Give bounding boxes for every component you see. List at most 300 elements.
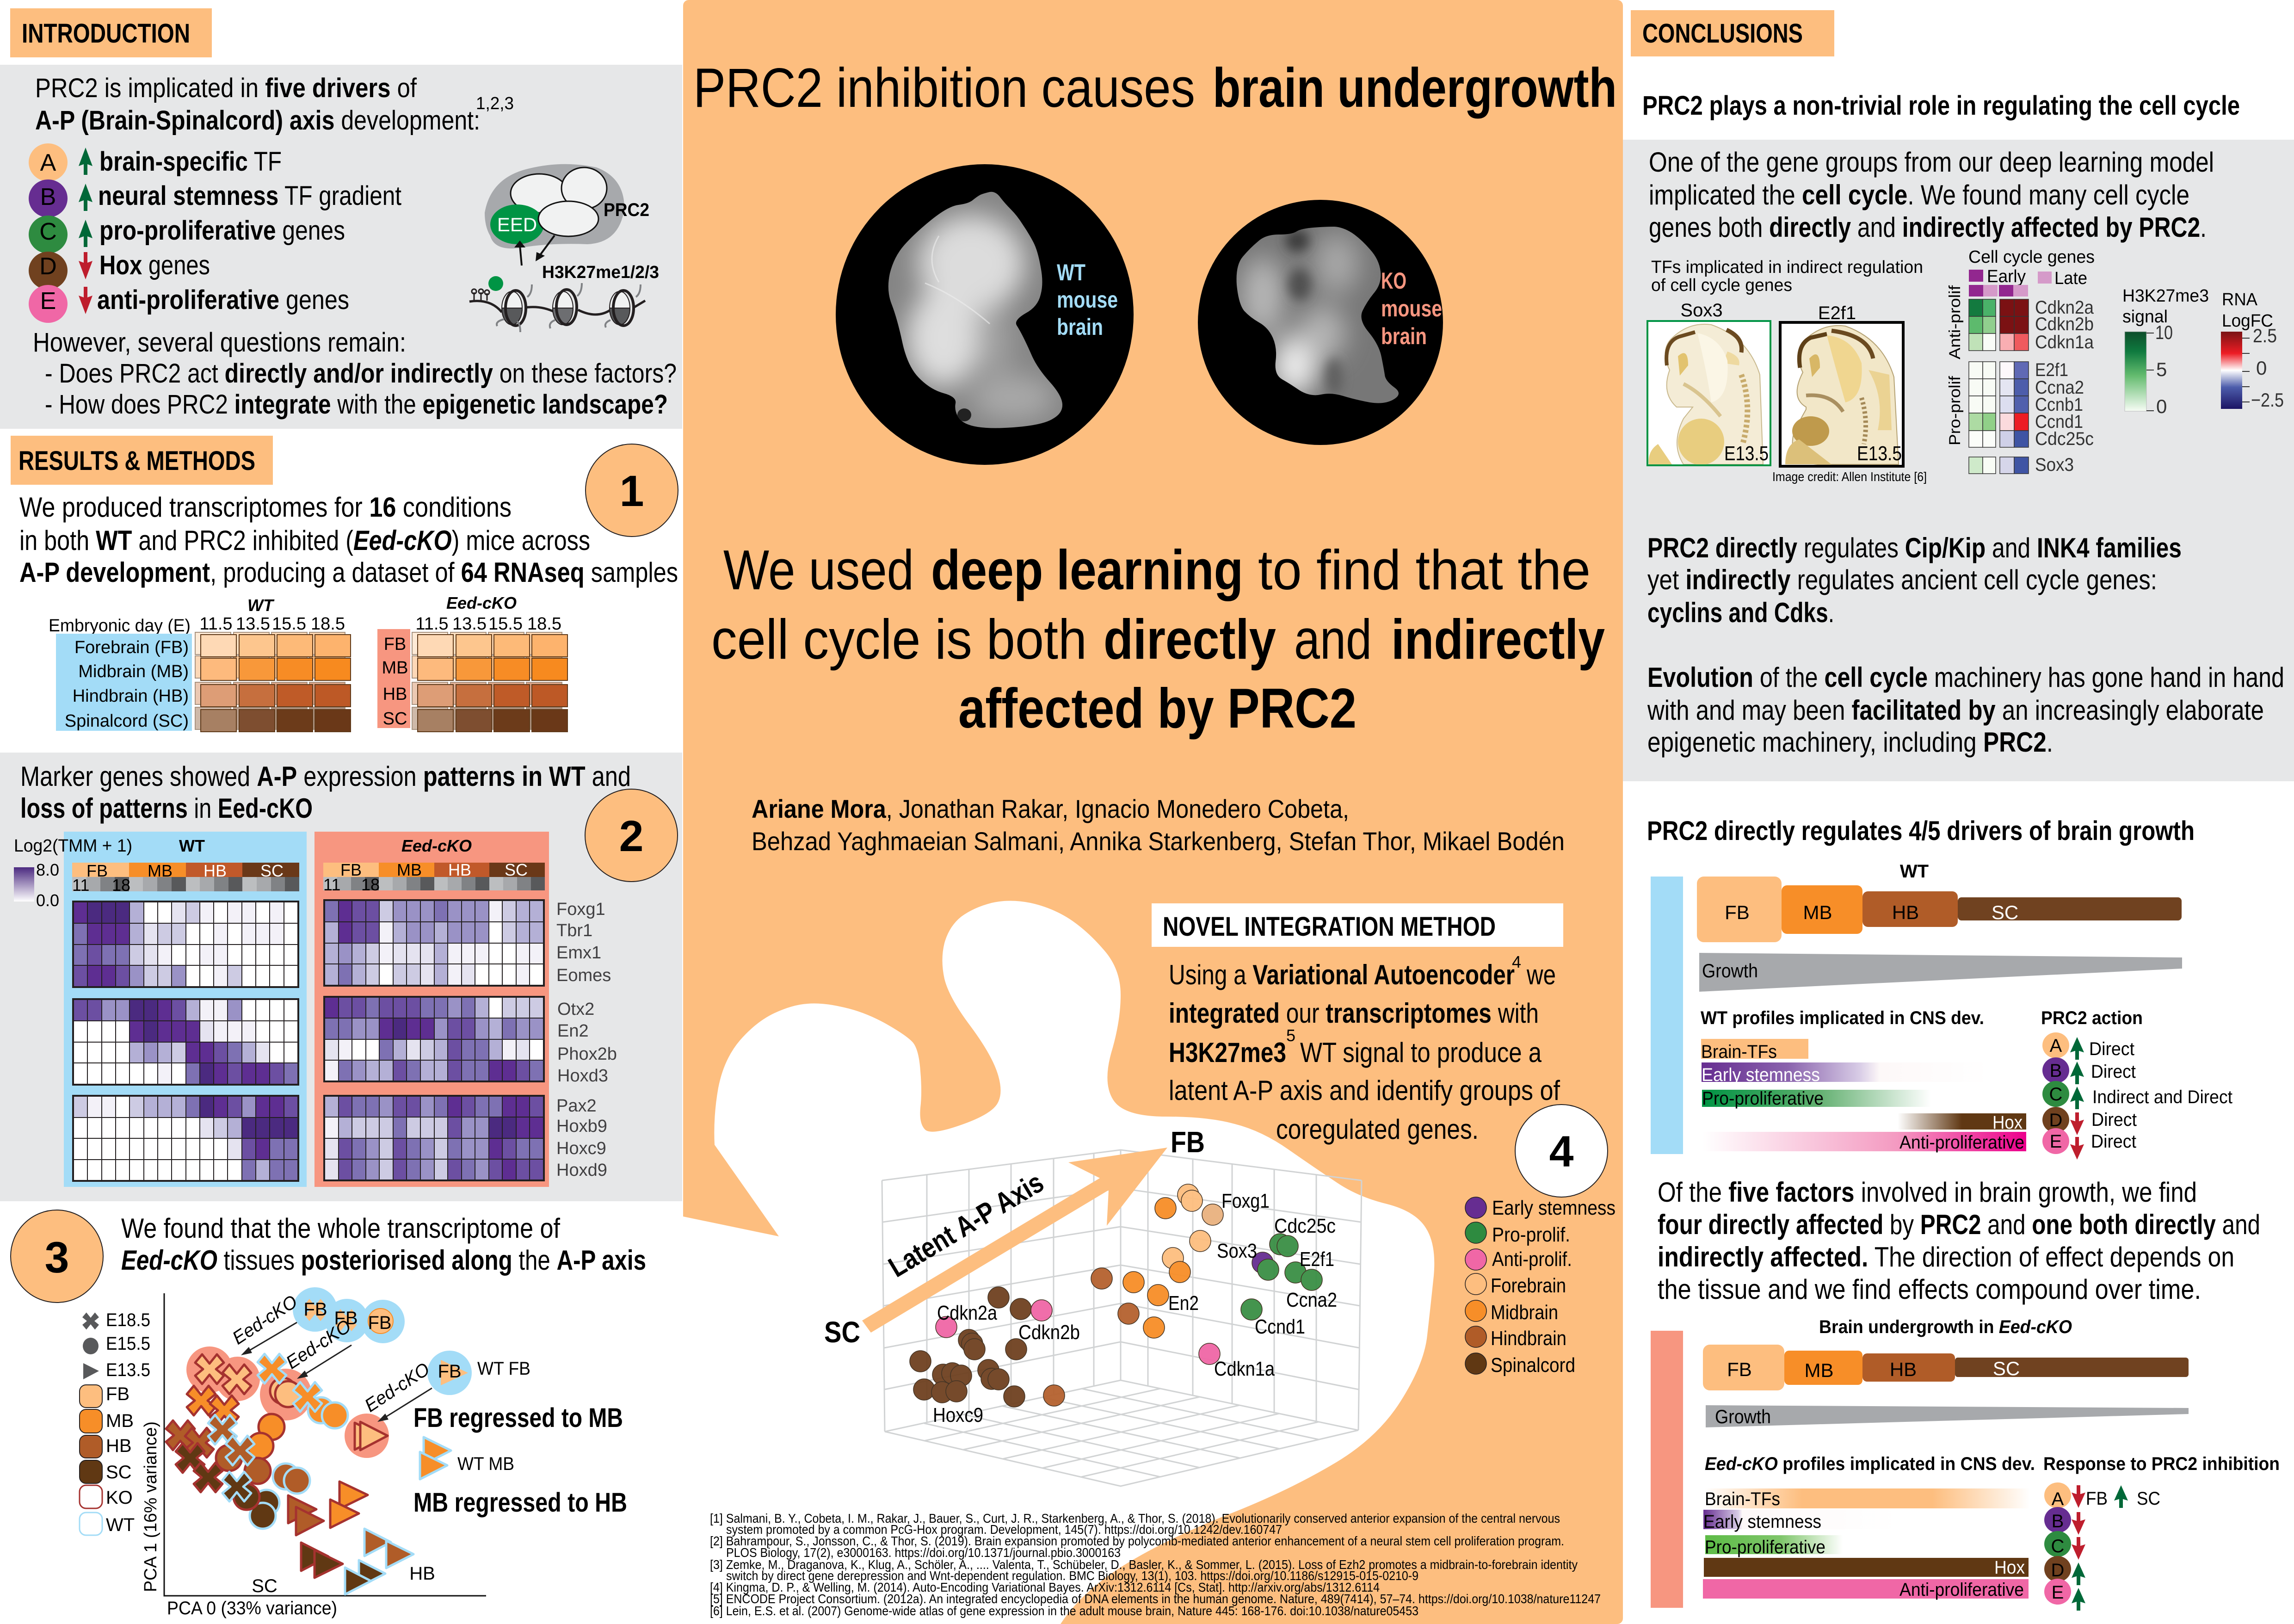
authors: Behzad Yaghmaeian Salmani, Annika Starkenberg, Stefan Thor, Mikael Bodén: [752, 827, 1565, 856]
colour scale: RNA LogFC: [2221, 290, 2284, 411]
diagram: WT brain regions: [1697, 861, 2182, 942]
chart: 3D latent space scatter: Cdkn1a: [1214, 1358, 1275, 1380]
text block: deep learning model: implicated the cell cycle. We found many cell cycle: [1649, 179, 2189, 210]
diagram: KO brain regions: FB: [1727, 1358, 1752, 1380]
text block: five drivers: PRC2 is implicated in five drivers of: [35, 73, 417, 103]
text block: variational autoencoder: H3K27me3: [1169, 1037, 1286, 1068]
headline: deep learning: cell cycle is both: [711, 608, 1087, 671]
gene labels: En2: [557, 1021, 589, 1041]
legend: PCA symbols: HB: [106, 1436, 132, 1456]
diagram: PRC2 complex on nucleosomes: PRC2: [604, 200, 649, 220]
panel: centre orange column: [683, 0, 1623, 1624]
headline: deep learning: deep learning: [931, 538, 1243, 601]
heading: introduction: [10, 8, 212, 57]
image: WT mouse brain: brain: [1057, 314, 1103, 340]
headline: deep learning: [711, 538, 1605, 740]
profile bars: WT: Pro-proliferative: [1702, 1088, 1824, 1109]
colour scale: RNA LogFC: 2.5: [2253, 325, 2277, 346]
authors: Ariane Mora, Jonathan Rakar, Ignacio Monedero Cobeta,: [752, 794, 1349, 823]
legend: PCA symbols: E13.5: [106, 1360, 150, 1380]
PRC2 action list: B: [2050, 1061, 2062, 1081]
white mouse silhouette: [683, 901, 1434, 1624]
profile bars: KO: Brain-TFs: [1705, 1489, 1780, 1509]
profile bars: WT: WT profiles implicated in CNS dev.: [1701, 1008, 1984, 1028]
heatmap: cell cycle genes: Cdkn2b: [2035, 314, 2094, 334]
response to PRC2 inhibition list: B: [2052, 1511, 2064, 1531]
heatmap: WT: 11: [72, 876, 89, 895]
chart: sample design grids: Midbrain (MB): [78, 662, 189, 681]
diagram: KO brain regions: SC: [1993, 1358, 2020, 1379]
heatmap: WT: MB: [148, 861, 173, 880]
colour scale: H3K27me3 signal: 10: [2155, 321, 2173, 343]
headline: deep learning: to find that the: [1258, 538, 1591, 601]
chart: sample design grids: 18.5: [527, 614, 561, 634]
references: [710, 1511, 1601, 1618]
text block: transcriptomes: in both WT and PRC2 inhibited (Eed-cKO) mice across: [19, 525, 590, 556]
PRC2 action list: D: [2049, 1110, 2062, 1130]
backing panel: WT heatmap: [64, 832, 307, 1187]
diagram: PRC2 complex on nucleosomes: [469, 164, 659, 332]
legend: gene groups: Anti-prolif.: [1492, 1248, 1572, 1271]
chart: 3D latent space scatter: En2: [1168, 1292, 1199, 1315]
PRC2 action list: Direct: [2091, 1110, 2137, 1130]
profile bars: KO: Pro-proliferative: [1705, 1537, 1825, 1557]
chart: 3D latent space scatter: Cdkn2a: [937, 1302, 997, 1324]
chart: PCA scatter: Eed-cKO: [361, 1359, 433, 1416]
chart: sample design grids: FB: [384, 635, 406, 654]
chart: PCA scatter: HB: [409, 1563, 435, 1584]
heatmap: Eed-cKO: MB: [397, 860, 422, 879]
text block: deep learning model: [1649, 147, 2214, 243]
colour scale: H3K27me3 signal: 5: [2156, 358, 2167, 380]
chart: sample design grids: 13.5: [236, 614, 270, 634]
chart: sample design grids: 11.5: [199, 614, 233, 634]
colour scale: RNA LogFC: RNA: [2222, 290, 2258, 309]
heatmap: cell cycle genes: Cell cycle genes: [1968, 247, 2095, 267]
heading: results and methods: RESULTS & METHODS: [18, 446, 255, 476]
response to PRC2 inhibition list: [2043, 1454, 2280, 1611]
text block: variational autoencoder: 5: [1286, 1026, 1295, 1045]
chart: sample design grids: Embryonic day (E): [49, 616, 191, 636]
step number 4: 4: [1549, 1127, 1574, 1176]
heatmap: Eed-cKO: SC: [505, 860, 528, 879]
chart: 3D latent space scatter: Ccna2: [1286, 1289, 1337, 1311]
text block: Cip/Kip and INK4: [1647, 532, 2182, 628]
response to PRC2 inhibition list: E: [2052, 1582, 2064, 1603]
references: [2] Bahrampour, S., Jonsson, C., & Thor, S. (2019). Brain expansion promoted by polycomb-mediated anterior enhancement of a neural stem cell proliferation program.: [710, 1534, 1564, 1548]
diagram: WT brain regions: HB: [1892, 902, 1919, 923]
profile bars: WT: Anti-proliferative: [1899, 1132, 2024, 1153]
profile bars: KO: Anti-proliferative: [1899, 1580, 2024, 1600]
list of five drivers: D: [39, 253, 57, 280]
growth wedge: WT: [1699, 953, 2182, 992]
list of five drivers: C: [39, 218, 57, 245]
legend: PCA symbols: SC: [106, 1462, 132, 1482]
chart: sample design grids: 11.5: [415, 614, 449, 634]
chart: sample design grids: [49, 593, 567, 732]
panel: WT brain growth: [1647, 816, 2260, 1305]
legend: PCA symbols: KO: [106, 1488, 133, 1508]
PRC2 action list: Direct: [2091, 1131, 2136, 1152]
legend: gene groups: Early stemness: [1492, 1197, 1616, 1219]
text block: variational autoencoder: coregulated genes.: [1276, 1114, 1479, 1145]
headline: deep learning: indirectly: [1391, 608, 1605, 671]
heatmap legend: 8.0: [36, 860, 59, 879]
gene labels: Hoxb9: [556, 1117, 607, 1136]
legend: PCA symbols: E15.5: [106, 1334, 150, 1354]
gene labels: Hoxd9: [556, 1161, 607, 1180]
text block: transcriptomes: We produced transcriptomes for 16 conditions: [19, 492, 512, 523]
diagram: PRC2 complex on nucleosomes: EED: [497, 214, 537, 235]
heading: results and methods: [11, 436, 273, 485]
chart: 3D latent space scatter: SC: [824, 1315, 860, 1349]
diagram: KO brain regions: HB: [1890, 1358, 1917, 1380]
panel: results and methods step 1: [11, 436, 678, 732]
PRC2 action list: Direct: [2089, 1039, 2134, 1059]
text block: variational autoencoder: 4: [1512, 952, 1521, 971]
image frames: [1647, 321, 1903, 466]
growth wedge: KO: [1706, 1405, 2189, 1427]
chart: PCA scatter: WT FB: [477, 1358, 530, 1379]
legend: PCA symbols: WT: [106, 1515, 135, 1535]
title: PRC2 inhibition causes: [693, 57, 1195, 119]
heatmap: cell cycle genes: Cdkn1a: [2035, 332, 2094, 352]
heatmap: cell cycle genes: Ccnb1: [2035, 395, 2083, 415]
response to PRC2 inhibition list: A: [2052, 1489, 2064, 1509]
heatmap legend: Log2(TMM + 1): [14, 836, 132, 856]
heatmap: cell cycle genes: Ccna2: [2035, 377, 2084, 398]
chart: sample design grids: Hindbrain (HB): [73, 686, 189, 706]
gene labels: Eomes: [556, 966, 611, 985]
profile bars: WT: Early stemness: [1702, 1065, 1820, 1085]
chart: PCA scatter: PCA 1 (16% variance): [141, 1421, 160, 1592]
text block: variational autoencoder: [1169, 952, 1560, 1145]
heatmap: cell cycle genes: Late: [2054, 269, 2087, 288]
list of five drivers: neural stemness TF gradient: [98, 181, 401, 211]
embryo: Sox3 section: [1649, 324, 1763, 465]
headline: deep learning: and: [1294, 608, 1372, 671]
colour scale: H3K27me3 signal: H3K27me3: [2122, 286, 2209, 306]
text block: posteriorised: [121, 1213, 646, 1276]
text block: evolution: epigenetic machinery, including PRC2.: [1647, 727, 2053, 758]
text block: open questions: - How does PRC2 integrate with the epigenetic landscape?: [45, 389, 668, 420]
chart: sample design grids: Eed-cKO: [446, 593, 517, 612]
chart: sample design grids: 15.5: [272, 614, 306, 634]
chart: sample design grids: 13.5: [452, 614, 487, 634]
grey background: introduction: [0, 65, 682, 429]
PRC2 action list: Direct: [2091, 1062, 2136, 1082]
diagram: WT brain regions: FB: [1725, 902, 1750, 923]
text block: Cip/Kip and INK4: PRC2 directly regulates Cip/Kip and INK4 families: [1647, 532, 2182, 563]
text block: deep learning model: genes both directly and indirectly affected by PRC2.: [1649, 212, 2207, 243]
heading: conclusions: [1631, 10, 1834, 56]
image: WT mouse brain: mouse: [1057, 287, 1118, 313]
gene labels: [556, 900, 617, 1180]
gene labels: Tbr1: [556, 921, 592, 940]
KO side bar: [1651, 1331, 1683, 1608]
embryo in situ images: E2f1: [1818, 303, 1856, 323]
text block: transcriptomes: [19, 492, 678, 588]
PRC2 action list: Indirect and Direct: [2092, 1087, 2232, 1107]
chart: PCA scatter: PCA 0 (33% variance): [167, 1598, 337, 1618]
text block: open questions: However, several questions remain:: [33, 327, 406, 358]
panel: introduction: [0, 8, 682, 429]
colour scale: RNA LogFC: −2.5: [2251, 389, 2284, 411]
legend: PCA symbols: MB: [106, 1411, 134, 1431]
headline: deep learning: affected by PRC2: [958, 677, 1357, 740]
list of five drivers: anti-proliferative genes: [97, 285, 349, 315]
diagram: KO brain regions: [1703, 1317, 2189, 1390]
gene labels: Hoxd3: [557, 1066, 608, 1086]
legend: PCA symbols: [80, 1310, 150, 1535]
diagram: WT brain regions: WT: [1900, 861, 1929, 882]
heatmap: cell cycle genes: Cdkn2a: [2035, 297, 2094, 318]
chart: PCA scatter: Eed-cKO: [229, 1291, 301, 1349]
heatmap: WT: WT: [179, 836, 205, 855]
chart: 3D latent space scatter: FB: [1171, 1125, 1205, 1159]
diagram: PRC2 complex on nucleosomes: H3K27me1/2/3: [542, 263, 659, 282]
references: PLOS Biology, 17(2), e3000163. https://doi.org/10.1371/journal.pbio.3000163: [726, 1545, 1121, 1560]
step number 3: [11, 1210, 103, 1303]
heatmap: Eed-cKO: 18: [361, 875, 380, 894]
chart: PCA scatter: Eed-cKO: [283, 1316, 355, 1373]
PRC2 action list: PRC2 action: [2041, 1008, 2143, 1028]
chart: sample design grids: Forebrain (FB): [74, 638, 189, 657]
image: KO mouse brain: [1198, 200, 1443, 445]
response to PRC2 inhibition list: D: [2051, 1560, 2064, 1581]
chart: PCA scatter: [141, 1287, 627, 1618]
chart: sample design grids: 18.5: [311, 614, 345, 634]
list of five drivers: [29, 143, 401, 323]
grey background: conclusions: [1623, 140, 2294, 781]
chart: sample design grids: SC: [383, 709, 407, 729]
text block: variational autoencoder: WT signal to produce a: [1300, 1037, 1542, 1068]
profile bars: KO: Early stemness: [1703, 1512, 1821, 1532]
gene labels: Hoxc9: [556, 1139, 606, 1158]
step number 1: 1: [620, 467, 644, 516]
heatmap: cell cycle genes: Early: [1987, 267, 2026, 286]
response to PRC2 inhibition list: C: [2051, 1536, 2064, 1556]
chart: PCA scatter: MB regressed to HB: [413, 1488, 627, 1518]
text block: five drivers: A-P (Brain-Spinalcord) axis development:: [35, 105, 480, 136]
embryo in situ images: Image credit: Allen Institute [6]: [1772, 469, 1927, 484]
chart: sample design grids: 15.5: [488, 614, 523, 634]
PRC2 action list: E: [2050, 1131, 2062, 1152]
heatmap: cell cycle genes: Sox3: [2035, 455, 2074, 475]
colour scale: RNA LogFC: LogFC: [2222, 311, 2273, 331]
text block: five drivers: 1,2,3: [476, 94, 514, 113]
panel: conclusions cell cycle: [1623, 10, 2294, 781]
PRC2 action list: [2041, 1008, 2232, 1160]
text block: five factors: [1658, 1177, 2260, 1305]
panel: step 2 marker genes: [0, 753, 682, 1201]
response to PRC2 inhibition list: Response to PRC2 inhibition: [2043, 1454, 2280, 1474]
step number 2: [585, 789, 678, 882]
legend: gene groups: [1465, 1197, 1616, 1377]
embryo in situ images: Sox3: [1680, 300, 1723, 321]
text block: variational autoencoder: integrated our transcriptomes with: [1169, 998, 1539, 1029]
heatmap: WT: 18: [112, 876, 130, 895]
headline: deep learning: We used: [723, 538, 914, 601]
heatmap: cell cycle genes: Pro-prolif: [1946, 376, 1964, 445]
heading: novel integration method: NOVEL INTEGRATION METHOD: [1163, 912, 1496, 942]
title: brain undergrowth: [1213, 57, 1617, 119]
references: [6] Lein, E.S. et al. (2007) Genome-wide atlas of gene expression in the adult mouse brain, Nature 445: 168-176. doi:10.1038/nature05453: [710, 1604, 1418, 1618]
image: KO mouse brain: mouse: [1381, 296, 1442, 321]
chart: PCA scatter: FB: [334, 1308, 358, 1328]
chart: 3D latent space scatter: Foxg1: [1221, 1190, 1270, 1212]
text block: five drivers: [35, 73, 514, 136]
PRC2 action list: A: [2050, 1036, 2062, 1056]
legend: gene groups: Pro-prolif.: [1492, 1223, 1570, 1246]
chart: PCA scatter: FB: [368, 1313, 392, 1333]
step number 1: [586, 444, 678, 537]
heatmap: WT: SC: [260, 861, 284, 880]
list of five drivers: B: [40, 184, 56, 210]
title: [693, 57, 1617, 119]
growth wedge: WT: Growth: [1702, 960, 1758, 982]
legend: gene groups: Forebrain: [1491, 1274, 1566, 1297]
chart: sample design grids: Spinalcord (SC): [65, 711, 189, 731]
heatmap: WT: HB: [204, 861, 227, 880]
text block: marker genes: Marker genes showed A-P expression patterns in WT and: [20, 761, 631, 792]
colour scale: H3K27me3 signal: signal: [2122, 307, 2168, 327]
colour scale: H3K27me3 signal: [2122, 286, 2209, 417]
embryo: E2f1 section: [1785, 326, 1899, 464]
chart: 3D latent space scatter: Latent A-P Axis: [883, 1167, 1049, 1284]
authors: [752, 794, 1565, 856]
response to PRC2 inhibition list: FB: [2086, 1488, 2108, 1509]
heading: introduction: INTRODUCTION: [22, 19, 190, 49]
gene labels: Otx2: [557, 1000, 594, 1019]
step number 4: [1515, 1105, 1608, 1197]
embryo in situ images: TFs implicated in indirect regulation: [1651, 258, 1923, 277]
profile bars: WT: Hox: [1992, 1112, 2023, 1133]
text block: five factors: four directly affected by PRC2 and one both directly and: [1658, 1209, 2260, 1240]
image: KO mouse brain: brain: [1381, 323, 1427, 349]
chart: PCA scatter: SC: [252, 1576, 278, 1596]
subheading: 4/5 drivers: PRC2 directly regulates 4/5 drivers of brain growth: [1647, 816, 2195, 846]
step number 3: 3: [45, 1233, 69, 1282]
image: KO mouse brain: KO: [1381, 268, 1406, 294]
list of five drivers: Hox genes: [99, 250, 210, 280]
colour scale: H3K27me3 signal: 0: [2156, 395, 2167, 417]
profile bars: KO: Hox: [1994, 1557, 2025, 1578]
diagram: WT brain regions: SC: [1992, 902, 2018, 923]
legend: gene groups: Spinalcord: [1491, 1354, 1575, 1377]
text block: variational autoencoder: we: [1526, 959, 1556, 990]
text block: Cip/Kip and INK4: cyclins and Cdks.: [1647, 597, 1834, 628]
text block: evolution: with and may been facilitated by an increasingly elaborate: [1647, 695, 2264, 726]
list of five drivers: pro-proliferative genes: [99, 216, 345, 246]
text block: transcriptomes: A-P development, producing a dataset of 64 RNAseq samples: [19, 557, 678, 588]
legend: PCA symbols: FB: [106, 1384, 130, 1404]
heatmap: cell cycle genes: Cdc25c: [2035, 429, 2094, 449]
grey background: step 2: [0, 753, 682, 1201]
references: [3] Zemke, M., Draganova, K., Klug, A., Schöler, A., .... Valenta, T., Schübeler, D., Basler, K., & Sommer, L. (2015). Loss of Ezh2 promotes a midbrain-to-forebrain identity: [710, 1557, 1578, 1572]
profile bars: KO: [1703, 1454, 2035, 1600]
heatmap: WT: FB: [86, 861, 108, 880]
text block: five factors: the tissue and we find effects compound over time.: [1658, 1274, 2201, 1305]
chart: PCA scatter: FB: [303, 1299, 327, 1320]
chart: sample design grids: WT: [247, 596, 275, 615]
text block: Cip/Kip and INK4: yet indirectly regulates ancient cell cycle genes:: [1647, 564, 2157, 595]
text block: variational autoencoder: latent A-P axis and identify groups of: [1169, 1075, 1560, 1106]
chart: 3D latent space scatter: [824, 1125, 1362, 1486]
panel: step 3 PCA: [11, 1210, 646, 1618]
references: [1] Salmani, B. Y., Cobeta, I. M., Rakar, J., Bauer, S., Curt, J. R., Starkenberg, A., & Thor, S. (2018). Evolutionarily conserved anterior expansion of the central nervous: [710, 1511, 1560, 1525]
heading: conclusions: CONCLUSIONS: [1642, 19, 1803, 49]
chart: sample design grids: MB: [382, 658, 408, 678]
image: WT mouse brain: WT: [1057, 259, 1085, 285]
WT side bar: [1651, 877, 1683, 1154]
backing panel: Eed-cKO heatmap: [314, 832, 549, 1187]
chart: 3D latent space scatter: Hoxc9: [933, 1404, 983, 1426]
heatmap: Eed-cKO: FB: [340, 860, 362, 879]
PRC2 action list: C: [2049, 1084, 2062, 1105]
chart: PCA scatter: WT MB: [457, 1454, 514, 1474]
diagram: KO brain regions: Brain undergrowth in Eed-cKO: [1819, 1317, 2072, 1337]
panel: Eed-cKO brain undergrowth: [1651, 1317, 2280, 1611]
chart: 3D latent space scatter: Ccnd1: [1255, 1315, 1305, 1338]
profile bars: WT: [1701, 1008, 2026, 1153]
text block: open questions: [33, 327, 677, 420]
embryo in situ images: E13.5: [1724, 442, 1769, 465]
chart: PCA scatter: FB regressed to MB: [413, 1403, 623, 1433]
chart: 3D latent space scatter: Cdc25c: [1274, 1215, 1336, 1237]
heading: novel integration method: [1152, 903, 1563, 947]
legend: PCA symbols: E18.5: [106, 1310, 150, 1330]
response to PRC2 inhibition list: SC: [2137, 1488, 2160, 1509]
references: switch by direct gene derepression and Wnt-dependent regulation. BMC Biology, 13(1), 103. https://doi.org/10.1186/s12915-015-0210-9: [726, 1568, 1418, 1583]
diagram: KO brain regions: MB: [1805, 1359, 1833, 1381]
heatmap: cell cycle genes: [1946, 247, 2095, 475]
text block: five factors: Of the five factors involved in brain growth, we find: [1658, 1177, 2197, 1208]
text block: open questions: - Does PRC2 act directly and/or indirectly on these factors?: [45, 358, 677, 389]
text block: five factors: indirectly affected. The direction of effect depends on: [1658, 1241, 2234, 1272]
headline: deep learning: directly: [1104, 608, 1276, 671]
image: WT mouse brain: [836, 164, 1134, 465]
heatmap: Eed-cKO: 11: [323, 875, 340, 894]
heatmap: Eed-cKO: [323, 836, 545, 1181]
embryo in situ images: [1647, 258, 1927, 484]
step number 2: 2: [619, 812, 643, 861]
list of five drivers: brain-specific TF: [99, 147, 282, 177]
heatmap: Eed-cKO: Eed-cKO: [401, 836, 472, 855]
references: [4] Kingma, D. P., & Welling, M. (2014). Auto-Encoding Variational Bayes. ArXiv:1312.6114 [Cs, Stat]. http://arxiv.org/abs/1312.6114: [710, 1580, 1380, 1594]
heatmap legend: [14, 836, 132, 910]
heatmap: WT: [72, 836, 299, 1182]
gene labels: Pax2: [556, 1096, 597, 1116]
heatmap: cell cycle genes: E2f1: [2035, 360, 2068, 380]
text block: marker genes: [20, 761, 631, 824]
profile bars: WT: Brain-TFs: [1701, 1042, 1777, 1062]
chart: 3D latent space scatter: E2f1: [1300, 1248, 1334, 1271]
growth wedge: KO: Growth: [1715, 1406, 1771, 1427]
heatmap: cell cycle genes: Ccnd1: [2035, 412, 2083, 432]
embryo in situ images: E13.5: [1857, 442, 1902, 465]
text block: marker genes: loss of patterns in Eed-cKO: [20, 793, 313, 824]
text block: posteriorised: Eed-cKO tissues posteriorised along the A-P axis: [121, 1245, 646, 1276]
chart: sample design grids: HB: [383, 685, 407, 704]
colour scale: RNA LogFC: 0: [2256, 357, 2267, 379]
gene labels: Foxg1: [556, 900, 605, 919]
orange background: [683, 0, 1623, 1624]
chart: 3D latent space scatter: Sox3: [1217, 1240, 1257, 1262]
profile bars: KO: Eed-cKO profiles implicated in CNS dev.: [1705, 1454, 2035, 1474]
text block: evolution: [1647, 662, 2284, 758]
heatmap legend: 0.0: [36, 891, 59, 910]
